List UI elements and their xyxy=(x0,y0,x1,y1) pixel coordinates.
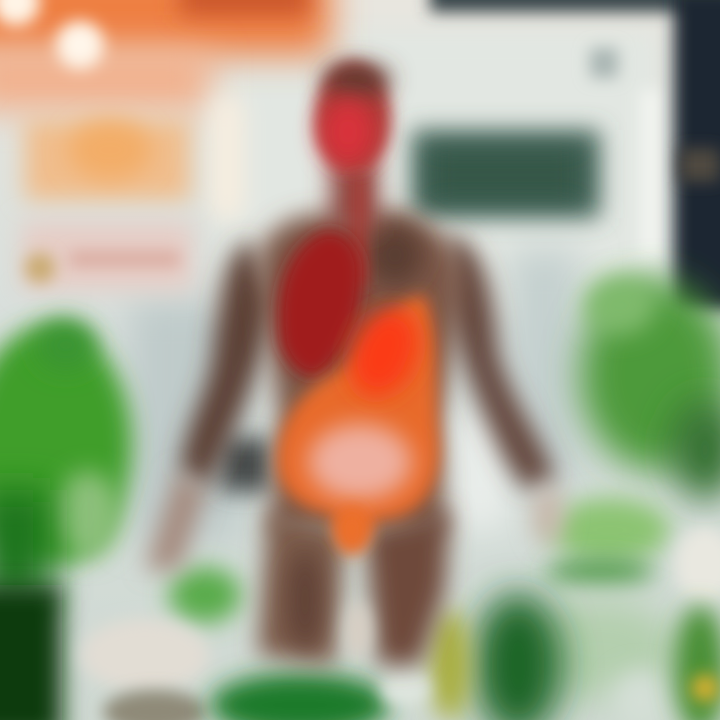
dark top right frame xyxy=(430,0,720,310)
torso xyxy=(259,210,463,530)
head xyxy=(315,62,391,174)
shin highlight xyxy=(289,550,321,650)
right hand xyxy=(533,485,563,545)
face red xyxy=(320,98,376,166)
ceiling lights xyxy=(0,0,244,220)
left plant xyxy=(0,319,132,720)
left hand xyxy=(145,470,206,570)
abdominal orange mass xyxy=(277,295,439,546)
human figure xyxy=(145,62,563,665)
left leg xyxy=(258,510,345,665)
hair xyxy=(323,64,391,96)
left arm xyxy=(180,240,275,490)
lower right foliage xyxy=(430,498,720,720)
right plant xyxy=(580,275,720,500)
stomach bright xyxy=(337,297,431,407)
right arm xyxy=(445,235,555,490)
dark green board xyxy=(412,130,600,218)
gap between legs xyxy=(345,602,371,658)
intestines pale pink xyxy=(308,424,412,500)
pink sign panel xyxy=(22,222,192,290)
neck xyxy=(330,160,378,230)
liver in dark red xyxy=(278,230,362,377)
right leg xyxy=(365,510,450,665)
orange glow top left xyxy=(0,0,330,110)
esophagus xyxy=(352,175,366,285)
digestive organs xyxy=(277,175,439,554)
colon tail xyxy=(334,506,370,554)
lower left foliage and white flower xyxy=(81,567,429,720)
orange sign panel xyxy=(25,120,190,200)
chest shadow xyxy=(367,225,423,285)
